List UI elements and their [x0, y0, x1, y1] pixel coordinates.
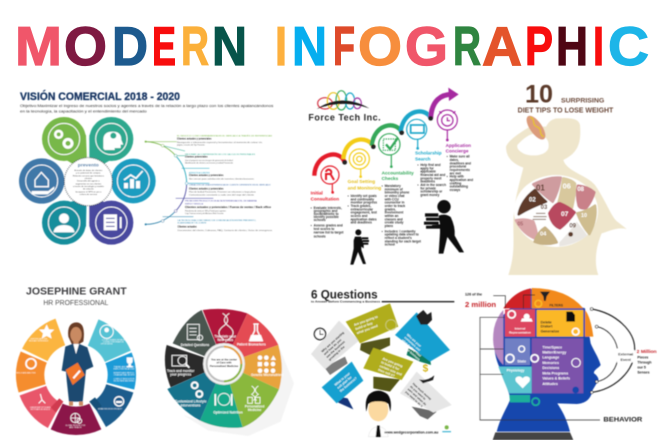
callout: gray money question: you want to do it	[404, 390, 424, 408]
step: accountability checks: within an	[384, 214, 399, 218]
step: accountability checks: classes and	[385, 217, 403, 221]
sector icons	[172, 313, 276, 406]
title	[15, 15, 649, 77]
delete distort generalize box: Generalize	[541, 330, 559, 334]
purple box	[531, 338, 583, 393]
timeline text blocks	[177, 135, 273, 232]
title: N	[292, 15, 327, 77]
petal: support agent	[42, 197, 87, 245]
physiology box	[498, 367, 539, 405]
panel: josephine grant	[16, 287, 136, 435]
step icons	[321, 110, 457, 194]
segment icons and labels: SKILLS AND ABILITIES	[16, 371, 36, 374]
heading: role: HR PROFESSIONAL	[43, 300, 108, 307]
sector labels: Customized Lifestyle	[175, 400, 207, 404]
external event label	[617, 350, 635, 362]
purple box: Meta Programs	[542, 371, 568, 375]
step: goal setting: application dates	[351, 217, 377, 221]
icon: small logo	[442, 425, 451, 432]
center text circle: y su potencial de compra.	[76, 172, 101, 175]
title: C	[608, 15, 649, 77]
step: initial consultation: Initial	[311, 191, 323, 196]
delete distort generalize box: Delete	[541, 320, 552, 324]
step: goal setting: engagement, test	[351, 211, 378, 215]
internal representation box: Representation	[509, 331, 531, 335]
bracket to behavior	[480, 317, 600, 420]
label: 126 of the 2 million	[465, 293, 535, 309]
timeline text blocks: EL NEGOCIO COMO HERRAMIENTA EN EL MERCADO A TRAVÉS DE REFERENCIAS	[177, 135, 273, 138]
step: initial consultation: •	[311, 206, 313, 210]
step: initial consultation: Consultation	[311, 196, 339, 201]
internal representation box: Internal	[515, 326, 526, 330]
center text circle: A través de datos de clientes	[74, 169, 103, 172]
step: scholarship search: Help find and	[420, 163, 441, 167]
center text circle: de relación	[83, 188, 94, 191]
panel: diet tips	[506, 80, 627, 275]
segment icons and labels: GLOBAL PERSPECTIVE	[65, 424, 86, 427]
sector labels	[167, 334, 285, 414]
sector labels: Personalized	[245, 404, 264, 408]
segment icons and labels: RELEVANT EXPERIENCE	[29, 339, 49, 342]
timeline text blocks: EL ASEGURADOR Y EL CLIENTE	[178, 222, 207, 225]
step: scholarship search: applicable	[420, 170, 436, 174]
timeline text blocks: Clientes potenciales	[185, 156, 208, 159]
callout: gray money question: How much money	[412, 382, 433, 401]
top wedge: red	[503, 288, 531, 308]
center text circle	[64, 158, 112, 206]
step: initial consultation: •	[311, 224, 313, 228]
timeline text blocks: Navegación e información especial y herramientas al momento de cotizar vía	[177, 141, 263, 144]
petal: head with gear	[89, 117, 133, 172]
step: accountability checks: counsellor in	[385, 201, 405, 205]
wheel shadow	[183, 345, 294, 436]
segment icons and labels: ORGANIZATIONAL GROWTH	[114, 373, 135, 376]
left crescent	[493, 310, 503, 365]
step: scholarship search: apply for	[420, 166, 435, 170]
head silhouette	[494, 288, 601, 432]
segment icons and labels: CERTIFICATIONS	[30, 337, 48, 340]
segment icons and labels: TRAINED AND VERIFIED	[114, 365, 135, 368]
purple box: Values & Beliefs	[542, 376, 570, 380]
step: accountability checks: standing for each target	[385, 239, 422, 243]
step: application concierge: essays	[450, 188, 461, 192]
objective text: en la tecnología, la capacitación y el entendimiento del mercado	[20, 109, 147, 113]
center text circle: cultura de servicio	[80, 193, 98, 196]
callout: olive question two: then sell it?	[377, 368, 395, 378]
step: application concierge: application and	[450, 178, 473, 182]
timeline text blocks: Clientes actuales	[178, 225, 197, 228]
internal representation box	[505, 309, 535, 337]
step: application concierge: Concierge	[446, 149, 469, 154]
step: scholarship search	[415, 151, 446, 197]
step: goal setting: and continually	[351, 197, 374, 201]
purple box: Decisions	[542, 366, 559, 370]
sector labels: Track and monitor	[167, 369, 195, 373]
callout: blue people question: what do they need	[400, 338, 422, 358]
center text circle: Relación cercana que fortalezca	[73, 174, 105, 177]
step: application concierge: Application	[446, 143, 471, 148]
title: A	[482, 15, 522, 77]
step: application concierge: •	[447, 175, 449, 179]
panel: force tech steps	[308, 88, 473, 265]
sector labels: your progress	[170, 373, 192, 377]
step: application concierge: requirements	[450, 168, 470, 172]
step: scholarship search: Scholarship	[415, 151, 442, 156]
step: scholarship search: •	[417, 183, 419, 187]
step: goal setting: monitor progress	[351, 201, 377, 205]
sector labels: Medicine	[248, 408, 262, 412]
title: D	[112, 15, 148, 77]
segment icons and labels: CONFLICT RESOLUTION	[114, 378, 135, 380]
step: scholarship search: •	[417, 163, 419, 167]
step: accountability checks: updating data sheet to	[385, 233, 419, 237]
petal: growth chart	[108, 159, 156, 203]
timeline text blocks: Clientes actuales y potenciales	[189, 187, 224, 190]
purple box: Attitudes	[542, 382, 558, 386]
center text circle: clientes	[85, 177, 93, 180]
step: accountability checks: Includes: I contantly	[385, 229, 416, 233]
step: scholarship search: properly meet	[420, 176, 442, 180]
callout: gray money question: $	[423, 364, 429, 375]
step: application concierge: procedural	[450, 165, 466, 169]
belly tips diagram	[514, 175, 598, 247]
panel: vision comercial	[19, 90, 273, 245]
title: O	[358, 15, 402, 77]
purple box: Matter/Energy	[542, 350, 566, 354]
sector labels: Optimized Nutrition	[213, 410, 243, 414]
logo: force tech: Force Tech Inc.	[308, 112, 381, 122]
tip 06: 06	[563, 181, 571, 190]
title: I	[275, 15, 287, 77]
callout: olive question two: Are you going	[382, 357, 403, 368]
step: initial consultation	[311, 191, 344, 238]
callout: olive question one: build or buy	[355, 321, 373, 331]
timeline text blocks: Clientes actuales y potenciales	[177, 138, 212, 141]
timeline text blocks: Identificación de clientes con tercero y Lealtad Prevención	[185, 162, 233, 165]
title: M	[15, 15, 62, 77]
panel: six questions	[311, 287, 454, 437]
title: F	[333, 15, 355, 77]
step: application concierge: deadlines and	[450, 161, 471, 165]
center text circle: prevento	[78, 162, 99, 168]
panel: personalized medicine wheel	[165, 309, 294, 436]
purple box: Language	[542, 356, 559, 360]
center text circle: segmentos en sus clientes	[75, 182, 102, 185]
callout tails	[324, 337, 437, 419]
two million senses label: Through	[637, 360, 651, 364]
callout: blue plan question: exit plan for	[336, 375, 353, 390]
objective text	[20, 104, 273, 113]
callout: gray clock question	[311, 321, 359, 369]
step: application concierge: •	[447, 155, 449, 159]
step: accountability checks: with CCU	[384, 197, 400, 201]
tip 05: 05	[517, 222, 523, 228]
step: scholarship search: financial aid and	[420, 173, 445, 177]
center text circle: a través de tecnología y modelo	[73, 185, 105, 188]
title: G	[405, 15, 448, 77]
step: initial consultation: identify possible	[314, 215, 339, 219]
step: initial consultation: Assess grades and	[314, 224, 343, 228]
step: scholarship search: Search	[415, 156, 431, 161]
two million senses label: our 5	[637, 366, 646, 370]
step: goal setting: scores and	[351, 214, 368, 218]
timeline text blocks: Ser cercan para satisfacción de nuestros clientes/asesores	[189, 178, 254, 181]
step: accountability checks	[382, 170, 422, 247]
callout: olive question one: what you need	[355, 324, 378, 335]
two million senses label: Pieces	[637, 355, 648, 359]
step: goal setting: extracurricular	[351, 207, 374, 211]
callout: gray clock question: Why are you starting	[320, 331, 345, 353]
callout: blue people question: Who are your	[406, 333, 423, 348]
timeline text blocks: Documentos del cliente, Cobranza, FAQ, Contacto de clientes, Guías de emergencia	[178, 229, 273, 232]
two million senses label: Senses	[637, 371, 650, 375]
step: accountability checks: Accountability	[382, 170, 414, 175]
objective text: Objetivo:Maximizar el ingreso de nuestros socios y agentes a través de la relación a largo plazo con los clientes apalancándonos	[20, 104, 273, 108]
timeline text blocks: Plan de lealtad Prevención, Prevenet con relaciones a largo plazo	[189, 190, 256, 193]
tip 08: 08	[577, 187, 585, 193]
callout: gray clock question: see the business	[325, 340, 346, 359]
step arcs arrow	[314, 88, 459, 176]
segment icons and labels: LEADERSHIP STYLE AND	[30, 406, 51, 409]
sector labels: New goals	[218, 338, 233, 342]
title: E	[152, 15, 176, 77]
title: P	[525, 15, 553, 77]
timeline text blocks: Clientes actuales y potenciales / Fuerza de ventas / Back office	[185, 206, 272, 209]
base shape	[493, 432, 573, 440]
center text circle: Desarrollo del agente a	[77, 180, 100, 183]
callout: olive question one	[346, 303, 398, 343]
timeline text blocks: LA TECNOLOGÍA COMO MEDIO DE COMUNICACIÓN ENTRE PREVENTO,	[178, 219, 257, 222]
step: accountability checks: grades,	[385, 207, 396, 211]
icon: large person carrying books	[424, 200, 464, 254]
timeline text blocks: Que el proyecto sea una imagen de generación de lealtad	[185, 159, 233, 162]
ring segments	[16, 319, 136, 435]
man head	[366, 391, 391, 437]
title: I	[593, 15, 604, 77]
wheel sectors	[165, 309, 282, 428]
two million senses label	[637, 349, 657, 375]
step: accountability checks: school	[385, 243, 395, 247]
step: initial consultation: Evaluate interests,	[314, 206, 342, 210]
timeline text blocks: Comunicación constante a cada uno del viaje del cliente	[189, 193, 254, 196]
behavior label: BEHAVIOR	[603, 417, 643, 424]
sector labels: Translate your	[215, 334, 237, 338]
callout: gray money question: do you want to	[409, 384, 427, 401]
callout: blue plan question: What is your	[334, 371, 351, 387]
sector labels: interventions	[181, 403, 201, 407]
timeline text blocks: Clientes actuales y potenciales	[189, 174, 224, 177]
logo: force tech	[308, 91, 381, 122]
callout: olive question two: to build it for	[380, 360, 401, 371]
step: initial consultation: narrow list to target	[314, 230, 344, 234]
step: initial consultation: social/athletic to	[314, 212, 339, 216]
step: application concierge: dates,	[450, 158, 459, 162]
website url: www.wedgecorporation.com.au	[383, 430, 438, 434]
step: application concierge: Help with	[450, 175, 464, 179]
step: initial consultation: schools	[314, 234, 326, 238]
step: application concierge: crafting	[450, 181, 461, 185]
step: accountability checks: •	[382, 184, 384, 188]
segment icons and labels	[16, 324, 135, 429]
step: accountability checks: minimum of	[385, 187, 404, 191]
step: goal setting: •	[348, 204, 350, 208]
purple box: Time/Space	[542, 345, 562, 349]
petal: money in hand	[19, 158, 68, 204]
title: O	[64, 15, 107, 77]
wheel center	[203, 343, 245, 385]
timeline text blocks: Plataforma de venta en SIS y Portal para agentes	[185, 209, 226, 212]
sector labels: Patient Biomarkers	[237, 343, 266, 347]
title: R	[181, 15, 209, 77]
heading: 6 questions: 6 Questions	[311, 287, 378, 301]
step: goal setting: Track grades,	[351, 204, 371, 208]
segment icons and labels: EMPLOYEE RELATIONS	[114, 367, 135, 370]
external event curves	[590, 308, 635, 394]
delete distort generalize box: Distort	[541, 325, 553, 329]
step: initial consultation: geographic and	[314, 209, 337, 213]
external event label: External	[618, 352, 633, 356]
segment icons and labels: LOCATION AND DETAILS	[102, 339, 125, 342]
wheel center: of Care with	[216, 361, 232, 365]
timeline text blocks: MEJORAR LA COMPRENSIÓN DE LOS CÁLCULOS PERSONALES	[185, 153, 256, 156]
wheel center: You are at the center	[211, 357, 237, 361]
callout: olive question two	[363, 348, 413, 380]
title: R	[453, 15, 481, 77]
heading: surprising diet tips	[518, 98, 614, 114]
step: scholarship search: for private	[420, 186, 436, 190]
wheel center: Personalized Medicine	[210, 364, 239, 368]
delete distort generalize box	[535, 300, 583, 337]
panel heading: VISIÓN COMERCIAL 2018 - 2020	[20, 90, 180, 103]
title: H	[556, 15, 588, 77]
step: accountability checks: create study	[385, 221, 404, 225]
icon: hot dog	[523, 113, 549, 143]
callout: gray money question: earn and when do	[407, 387, 428, 406]
step: accountability checks: •	[382, 229, 384, 233]
state box: State	[517, 359, 526, 363]
center text circle: Incorporar el NPS en pro a	[75, 190, 102, 193]
step: accountability checks: bimonthy phone	[385, 191, 410, 195]
segment icons and labels: CONTACT INFORMATION	[103, 341, 124, 344]
step: application concierge: Make sure all	[450, 155, 470, 159]
step: scholarship search: scholarship or	[420, 190, 443, 194]
tip 02: 02	[529, 198, 536, 204]
filters block	[532, 288, 593, 337]
heading: ten: 10	[525, 80, 553, 108]
step: application concierge	[446, 143, 473, 192]
purple box: Memories	[542, 361, 559, 365]
tip 09: 09	[569, 224, 577, 230]
step: application concierge: are met	[450, 171, 462, 175]
timeline text blocks: Caja Transaccional y de Alianzas Red Ocasión	[185, 212, 224, 215]
step: scholarship search: deadlines	[420, 180, 435, 184]
petal flower diagram	[19, 117, 156, 245]
arm gap	[517, 133, 549, 155]
callout: gray money question	[400, 364, 452, 413]
external event label: Event	[620, 358, 632, 362]
step: scholarship search: Aid in the search	[420, 183, 446, 187]
step: goal setting: Goal Setting	[348, 179, 375, 184]
callout: gray clock question: and how do you	[323, 338, 342, 356]
step: initial consultation: schools	[314, 218, 326, 222]
state box	[505, 338, 530, 365]
timeline text blocks: SIMPLE Y SENCILLA	[185, 202, 204, 205]
step: initial consultation: test scores to	[314, 227, 334, 231]
callout: blue people question	[395, 310, 450, 362]
step: accountability checks: plans	[385, 224, 393, 228]
body silhouette	[506, 118, 627, 275]
heading: surprising diet tips: SURPRISING	[561, 98, 604, 105]
segment icons and labels: RECRUITMENT AND HIRING	[114, 379, 135, 382]
step: accountability checks: order to track	[385, 204, 405, 208]
icon: small person carrying books	[350, 229, 369, 265]
callout: blue people question: from your business	[399, 341, 421, 362]
step: scholarship search: grant money	[420, 193, 440, 197]
timeline arc with lines	[145, 141, 213, 225]
callout: blue plan question	[322, 362, 363, 403]
segment icons and labels: BENEFITS AND PAYROLL	[114, 371, 134, 374]
label: 126 of the 2 million: 126 of the	[465, 293, 482, 297]
step: application concierge: outstanding	[450, 185, 468, 189]
timeline text blocks: CREACIÓN DE UNA EXPERIENCIA DE CLIENTE DIFERENTE EN EL MERCADO	[189, 184, 271, 187]
filters block: FILTERS	[549, 304, 564, 308]
step: goal setting: •	[348, 194, 350, 198]
two million senses label: 2 Million	[637, 349, 657, 355]
petal: checklist	[89, 197, 133, 245]
callout: gray clock question: growing in the	[328, 345, 346, 362]
title: N	[212, 15, 247, 77]
step: accountability checks: involvement	[385, 211, 404, 215]
step: accountability checks: or video chat	[385, 194, 405, 198]
sector labels: Detailed Questions	[181, 343, 210, 347]
segment icons and labels: OPPORTUNITIES	[101, 344, 113, 346]
callout: olive question two: certain size and	[379, 364, 402, 377]
callout: olive question one: Are you going to	[353, 315, 378, 327]
label: 126 of the 2 million: 2 million	[465, 300, 496, 309]
sector labels: Genetic Micronutrient	[251, 373, 285, 377]
tip 10: 10	[581, 213, 587, 219]
woman figure	[62, 322, 93, 406]
segment icons and labels: MOTIVATION SKILLS	[31, 408, 51, 411]
callout: blue people question: customers and	[404, 335, 421, 352]
step: accountability checks: Mandatory	[385, 184, 401, 188]
heading: surprising diet tips: DIET TIPS TO LOSE WEIGHT	[518, 107, 614, 114]
step: goal setting: Identify set goals	[351, 194, 377, 198]
timeline text blocks: PROMOVER PRODUCTOS DE ALTA INTERMEDIACIÓN, DE MANERA	[185, 200, 258, 203]
step: accountability checks: Checks	[382, 176, 399, 181]
tip 04: 04	[540, 232, 547, 238]
step: goal setting: and Monitoring	[348, 185, 381, 190]
physiology box: Physiology	[507, 368, 525, 372]
heading: name: JOSEPHINE GRANT	[26, 287, 127, 298]
tip 03: 03	[541, 205, 548, 211]
callout: blue plan question: the business?	[339, 376, 358, 393]
timeline text blocks: página, a través del Top Prevento	[177, 144, 205, 147]
segment icons and labels: AND REACH	[69, 426, 82, 429]
tip 01: 01	[536, 183, 545, 192]
timeline text blocks: ATENCIÓN A CLIENTES	[189, 171, 210, 174]
panel: head model	[465, 288, 657, 440]
tip 07: 07	[561, 211, 569, 218]
step: accountability checks: reflect a student's	[385, 236, 412, 240]
step: goal setting: and deadlines	[351, 221, 372, 225]
step: goal setting	[348, 179, 381, 225]
segment icons and labels: HUMAN RESOURCES SPECIALIST	[98, 407, 123, 410]
petal: gears	[42, 117, 87, 172]
subheading: to Answer Before Commencing a Business	[311, 299, 381, 303]
